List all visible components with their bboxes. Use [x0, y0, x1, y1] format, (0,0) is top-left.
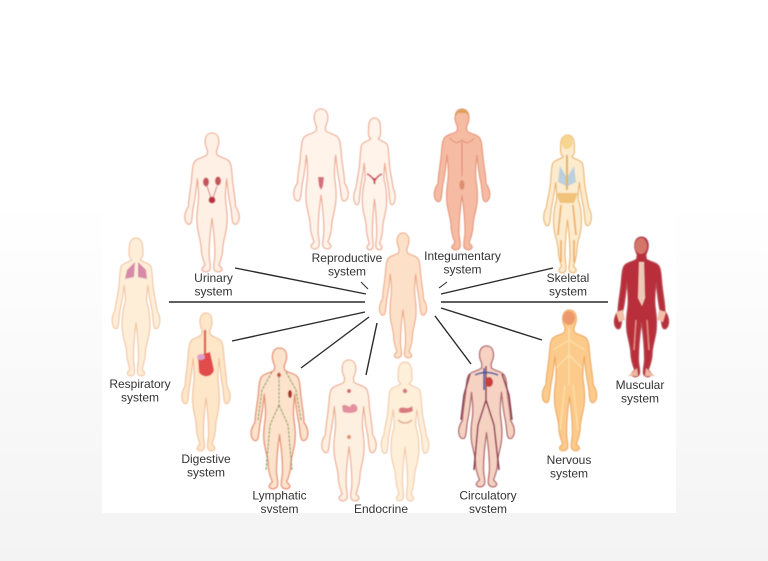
label: nervous: system	[550, 466, 588, 480]
connector lines	[169, 268, 608, 375]
figure: digestive system	[182, 313, 230, 451]
figure: circulatory system	[459, 346, 514, 487]
label: lymphatic: system	[260, 502, 299, 516]
label: urinary: Urinary	[194, 271, 233, 285]
label: skeletal: Skeletal	[547, 271, 589, 285]
label: respiratory: system	[121, 390, 159, 404]
label: integumentary: system	[443, 262, 482, 276]
label: urinary: system	[194, 284, 233, 298]
label: skeletal: system	[549, 284, 587, 298]
label: nervous: Nervous	[547, 453, 591, 467]
figure: endocrine system male	[322, 360, 376, 501]
figure: urinary system	[185, 133, 239, 272]
figure: integumentary system	[434, 109, 490, 250]
label: lymphatic: Lymphatic	[252, 488, 307, 502]
label: respiratory: Respiratory	[109, 377, 171, 391]
label: integumentary: Integumentary	[424, 249, 501, 263]
figure: respiratory system	[112, 238, 160, 376]
figure: endocrine system female	[381, 362, 429, 501]
label: muscular: Muscular	[616, 378, 664, 392]
white picture panel	[102, 120, 676, 513]
label: reproductive: Reproductive	[312, 251, 382, 265]
central figure	[379, 233, 427, 358]
label: circulatory: Circulatory	[459, 488, 517, 502]
label: muscular: system	[621, 392, 659, 406]
label: endocrine: Endocrine	[354, 502, 408, 516]
figure: muscular system	[614, 237, 669, 377]
labels	[109, 249, 664, 516]
figure: reproductive system male	[294, 109, 348, 249]
figure: nervous system	[542, 310, 597, 451]
figure: skeletal system	[544, 135, 591, 273]
figure: lymphatic system	[251, 348, 308, 489]
label: reproductive: system	[328, 264, 366, 278]
label: circulatory: system	[469, 502, 507, 516]
figure: reproductive system female	[354, 118, 395, 250]
label: digestive: Digestive	[181, 452, 231, 466]
label: digestive: system	[187, 466, 225, 480]
